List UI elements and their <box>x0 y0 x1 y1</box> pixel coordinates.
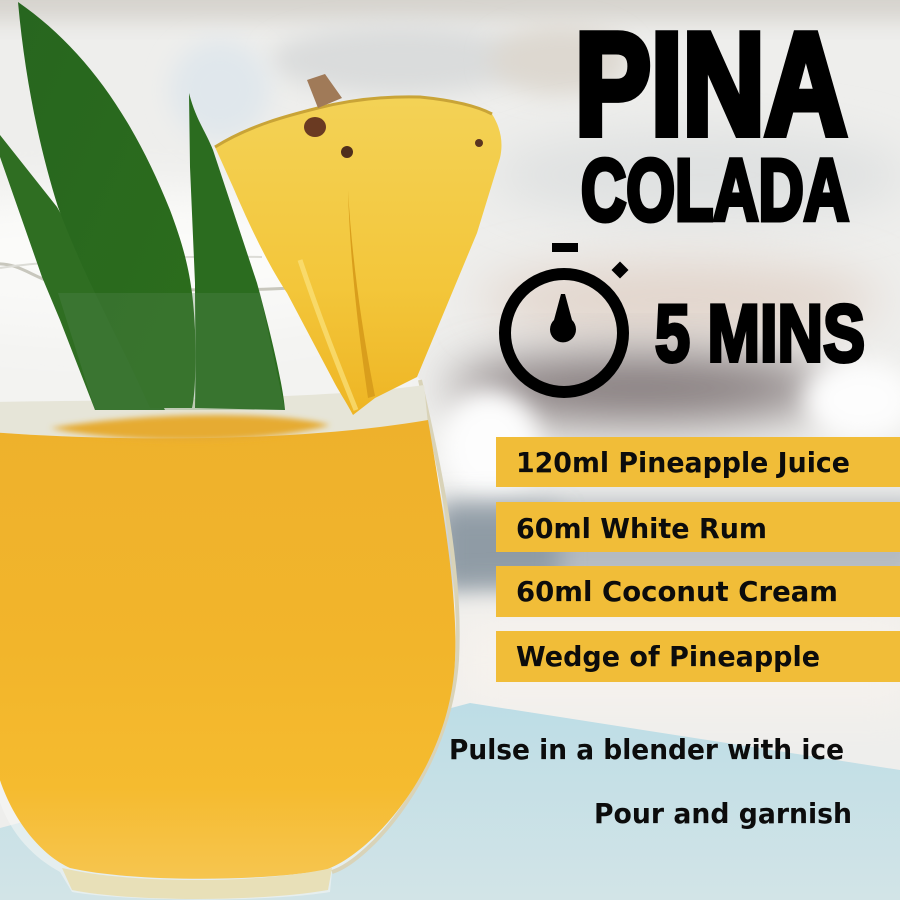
drink glass <box>0 257 458 900</box>
ingredient 3: 60ml Coconut Cream <box>516 575 838 608</box>
ingredient 2 <box>496 502 900 552</box>
drink liquid <box>0 420 455 879</box>
rind edge <box>215 97 492 147</box>
glass rim <box>0 264 290 290</box>
ingredient bars <box>496 437 900 682</box>
table surface <box>0 703 900 900</box>
rind eyes <box>304 117 326 137</box>
foam shadow <box>50 415 330 440</box>
pineapple stem <box>307 74 342 108</box>
stopwatch icon <box>505 243 628 392</box>
ingredient 2: 60ml White Rum <box>516 512 767 545</box>
drink foam <box>0 385 428 439</box>
ingredient 4 <box>496 631 900 682</box>
ingredient 4: Wedge of Pineapple <box>516 640 820 673</box>
ingredient 1 <box>496 437 900 487</box>
leaf glass tint <box>58 293 285 410</box>
left leaf <box>0 135 165 410</box>
tall leaf <box>18 2 195 408</box>
wedge crease <box>348 190 375 398</box>
glass side <box>332 380 458 872</box>
pineapple wedge garnish <box>215 74 501 415</box>
wedge highlight <box>300 260 356 410</box>
pineapple leaves <box>0 2 285 410</box>
ingredient 1: 120ml Pineapple Juice <box>516 446 850 479</box>
instruction 1: Pulse in a blender with ice <box>449 733 844 766</box>
title <box>575 3 849 239</box>
right leaf <box>189 93 285 410</box>
back rim <box>0 257 262 268</box>
glass bowl <box>0 262 458 900</box>
glass base <box>62 868 332 899</box>
instruction 2: Pour and garnish <box>594 797 852 830</box>
ingredient 3 <box>496 566 900 617</box>
